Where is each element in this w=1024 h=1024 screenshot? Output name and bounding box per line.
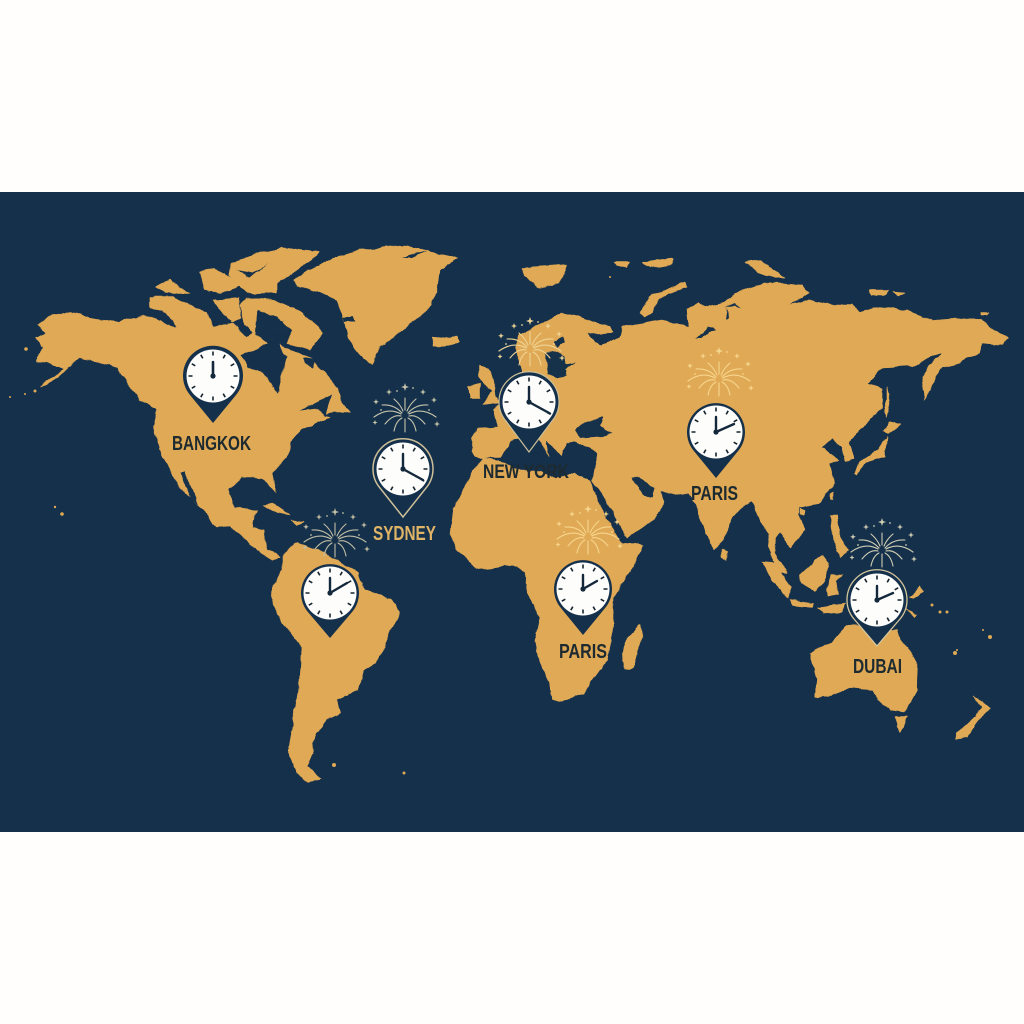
sea: Gulf of St Lawrence xyxy=(300,394,332,416)
land: Eurasia xyxy=(472,283,1009,573)
land: Arctic islands of Canada xyxy=(150,248,323,350)
sea: Baltic xyxy=(545,350,577,378)
land: Greenland xyxy=(293,245,458,365)
firework: central Asia xyxy=(686,347,754,396)
map ocean background xyxy=(0,192,1024,832)
land: Southeast Asian islands xyxy=(722,491,924,618)
label: PARIS over Asia: PARIS xyxy=(691,482,738,505)
panel: world map xyxy=(0,192,1024,832)
land: Iceland xyxy=(432,336,460,348)
land: Africa xyxy=(450,458,643,702)
land: Tasmania and New Zealand xyxy=(895,695,990,740)
clock pin: Atlantic, gold outline xyxy=(373,439,433,517)
land: Madagascar xyxy=(622,625,642,670)
sea: Gulf of Bothnia xyxy=(554,337,565,349)
clock pin: North America, 12:00 xyxy=(183,346,243,423)
land: North America xyxy=(35,312,350,560)
inland seas and straits xyxy=(180,251,741,505)
land: Japan and Sakhalin xyxy=(855,387,900,475)
sea: Black Sea xyxy=(575,417,612,438)
sea: Ungava Bay xyxy=(303,358,316,368)
land: northern Arctic islands xyxy=(263,258,989,525)
firework: northern Europe xyxy=(498,317,565,366)
clock pin: Africa xyxy=(554,560,612,635)
clock pin: Australia, gold outline xyxy=(847,570,907,646)
label: PARIS over Africa: PARIS xyxy=(559,640,607,663)
label: NEW YORK: NEW YORK xyxy=(483,462,569,483)
firework: Pacific above Australia xyxy=(850,518,917,567)
sea: Persian Gulf xyxy=(632,477,655,497)
land masses xyxy=(35,245,1009,782)
clock pin: Europe, gold outline xyxy=(499,372,559,452)
land: Australia xyxy=(810,625,918,712)
sea: Ob inlets xyxy=(695,302,741,337)
label: BANGKOK: BANGKOK xyxy=(172,432,251,455)
coastlines group xyxy=(35,245,1009,782)
clock pin: South America xyxy=(301,564,359,638)
sea: Gulf of California xyxy=(180,472,198,505)
label: DUBAI: DUBAI xyxy=(853,655,902,678)
sea: Arctic channels xyxy=(237,251,427,333)
clock pin: Asia xyxy=(687,403,745,478)
scattered islets xyxy=(9,276,992,774)
label: SYDNEY: SYDNEY xyxy=(373,522,436,545)
firework: Caribbean xyxy=(302,508,370,557)
firework: Atlantic above Sydney xyxy=(372,383,440,432)
firework: northeast Africa xyxy=(556,505,623,554)
land: South America xyxy=(272,543,400,782)
land: British Isles xyxy=(468,365,500,405)
